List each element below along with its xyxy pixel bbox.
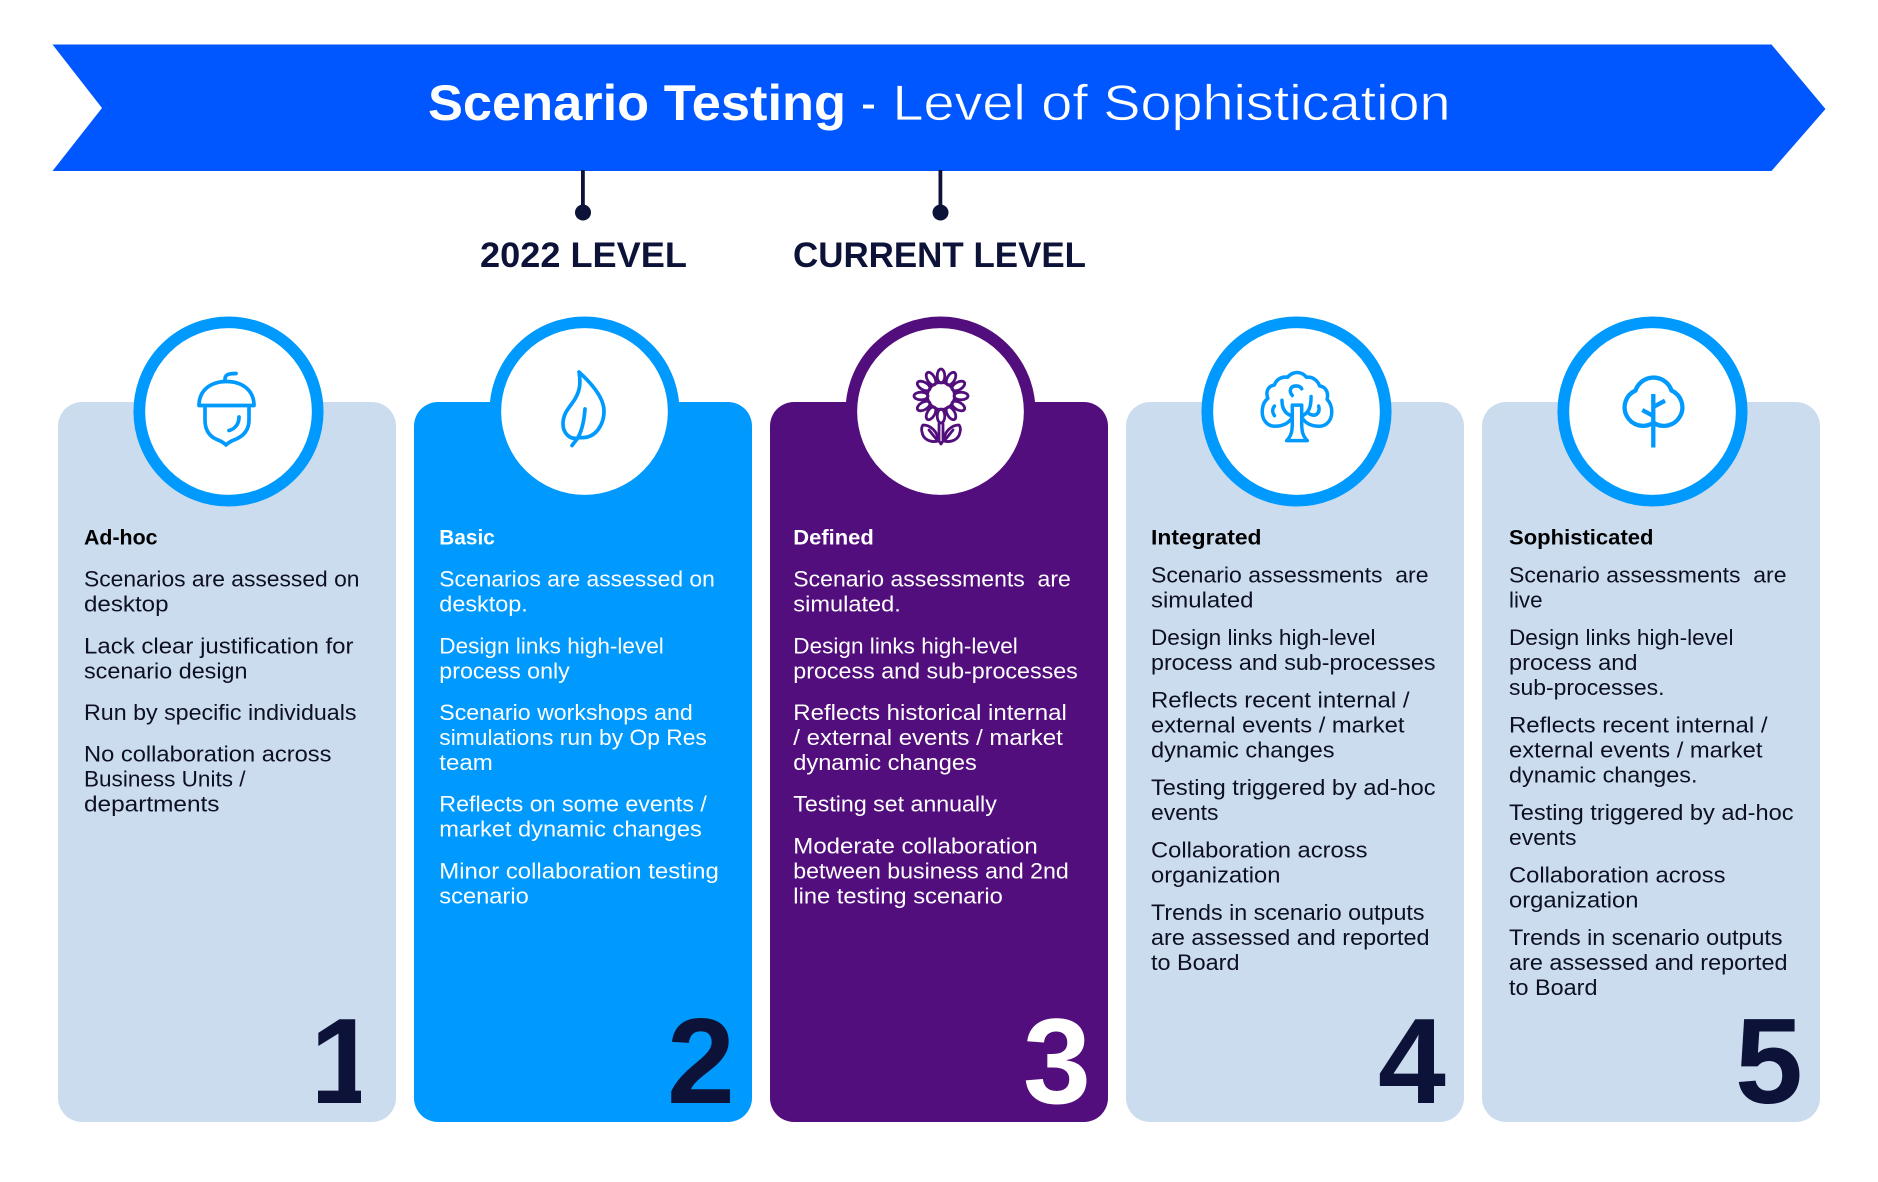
- text: defined description: dynamic changes: [793, 750, 977, 775]
- text: integrated description: events: [1151, 800, 1218, 825]
- text: basic description: Basic: [439, 525, 495, 549]
- text: basic description: team: [439, 750, 493, 775]
- text: sophisticated description: [1509, 525, 1794, 1000]
- text: sophisticated description: are assessed and reported: [1509, 950, 1788, 975]
- text: integrated description: are assessed and reported: [1151, 925, 1430, 950]
- number 5: 5: [1735, 993, 1803, 1129]
- text: sophisticated description: sub-processes.: [1509, 675, 1664, 700]
- text: sophisticated description: events: [1509, 825, 1576, 850]
- text: integrated description: Collaboration across: [1151, 837, 1368, 862]
- text: sophisticated description: to Board: [1509, 975, 1598, 1000]
- text: defined description: Defined: [793, 525, 874, 549]
- text: defined description: Scenario assessments are: [793, 567, 1071, 592]
- text: integrated description: Reflects recent internal /: [1151, 687, 1410, 712]
- text: ad-hoc description: Business Units /: [84, 767, 246, 792]
- text: sophisticated description: Reflects recent internal /: [1509, 712, 1768, 737]
- text: ad-hoc description: desktop: [84, 592, 168, 617]
- text: integrated description: [1151, 525, 1436, 975]
- text: integrated description: dynamic changes: [1151, 737, 1334, 762]
- icon: oak tree: [1207, 322, 1386, 501]
- text: sophisticated description: Collaboration across: [1509, 862, 1726, 887]
- text: basic description: scenario: [439, 883, 529, 908]
- title: [428, 75, 1450, 131]
- text: sophisticated description: Testing triggered by ad-hoc: [1509, 800, 1794, 825]
- number 4: 4: [1378, 993, 1446, 1129]
- text: integrated description: to Board: [1151, 950, 1240, 975]
- text: ad-hoc description: Scenarios are assessed on: [84, 567, 360, 592]
- panel: level 1 ad-hoc: [58, 322, 396, 1129]
- text: integrated description: Integrated: [1151, 525, 1262, 549]
- number 3: 3: [1023, 993, 1091, 1129]
- text: basic description: simulations run by Op Res: [439, 725, 707, 750]
- text: integrated description: Design links high-level: [1151, 625, 1376, 650]
- text: sophisticated description: Sophisticated: [1509, 525, 1654, 549]
- text: defined description: [793, 525, 1078, 908]
- text: defined description: process and sub-processes: [793, 658, 1078, 683]
- text: sophisticated description: dynamic changes.: [1509, 762, 1698, 787]
- text: basic description: Scenario workshops and: [439, 700, 693, 725]
- text: defined description: Moderate collaboration: [793, 833, 1038, 858]
- panel: level 5 sophisticated: [1482, 322, 1820, 1129]
- text: defined description: Testing set annually: [793, 792, 997, 817]
- text: ad-hoc description: Lack clear justification for: [84, 633, 354, 658]
- number 2: 2: [667, 993, 735, 1129]
- text: defined description: Design links high-level: [793, 633, 1018, 658]
- text: integrated description: Trends in scenario outputs: [1151, 900, 1424, 925]
- marker: 2022 level: 2022 LEVEL: [480, 236, 687, 275]
- text: defined description: between business and 2nd: [793, 858, 1069, 883]
- text: integrated description: external events / market: [1151, 712, 1404, 737]
- panel: level 4 integrated: [1126, 322, 1464, 1129]
- text: integrated description: simulated: [1151, 587, 1254, 612]
- icon: leaf: [495, 322, 674, 501]
- text: basic description: Reflects on some events /: [439, 792, 708, 817]
- text: defined description: Reflects historical internal: [793, 700, 1067, 725]
- text: integrated description: organization: [1151, 862, 1280, 887]
- text: integrated description: Scenario assessments are: [1151, 562, 1428, 587]
- text: ad-hoc description: Ad-hoc: [84, 525, 158, 549]
- text: basic description: [439, 525, 719, 908]
- text: sophisticated description: external events / market: [1509, 737, 1762, 762]
- text: basic description: Scenarios are assessed on: [439, 567, 715, 592]
- text: sophisticated description: Design links high-level: [1509, 625, 1734, 650]
- marker: current level: [793, 170, 1086, 275]
- text: sophisticated description: organization: [1509, 887, 1638, 912]
- text: integrated description: Testing triggered by ad-hoc: [1151, 775, 1436, 800]
- text: sophisticated description: Scenario assessments are: [1509, 562, 1786, 587]
- panel: level 3 defined: [770, 322, 1108, 1129]
- number 1: 1: [310, 993, 378, 1129]
- text: defined description: simulated.: [793, 592, 901, 617]
- text: ad-hoc description: Run by specific individuals: [84, 700, 356, 725]
- text: basic description: Minor collaboration testing: [439, 858, 719, 883]
- text: ad-hoc description: scenario design: [84, 658, 248, 683]
- icon: flower: [851, 322, 1030, 501]
- panel: level 2 basic: [414, 322, 752, 1129]
- marker: current level: CURRENT LEVEL: [793, 236, 1086, 275]
- text: defined description: / external events / market: [793, 725, 1063, 750]
- text: basic description: process only: [439, 658, 570, 683]
- text: sophisticated description: process and: [1509, 650, 1638, 675]
- title: Scenario Testing: [428, 75, 846, 131]
- text: integrated description: process and sub-processes: [1151, 650, 1436, 675]
- text: ad-hoc description: departments: [84, 792, 220, 817]
- icon: round tree: [1563, 322, 1742, 501]
- title: Level of Sophistication: [892, 75, 1450, 131]
- text: basic description: Design links high-level: [439, 633, 664, 658]
- title: -: [861, 75, 876, 131]
- text: sophisticated description: Trends in scenario outputs: [1509, 925, 1782, 950]
- text: ad-hoc description: [84, 525, 360, 817]
- text: basic description: desktop.: [439, 592, 528, 617]
- text: ad-hoc description: No collaboration across: [84, 742, 332, 767]
- icon: acorn: [139, 322, 318, 501]
- text: sophisticated description: live: [1509, 587, 1542, 612]
- text: defined description: line testing scenario: [793, 883, 1003, 908]
- marker: 2022 level: [480, 170, 687, 275]
- title banner: [52, 44, 1826, 171]
- text: basic description: market dynamic changes: [439, 817, 702, 842]
